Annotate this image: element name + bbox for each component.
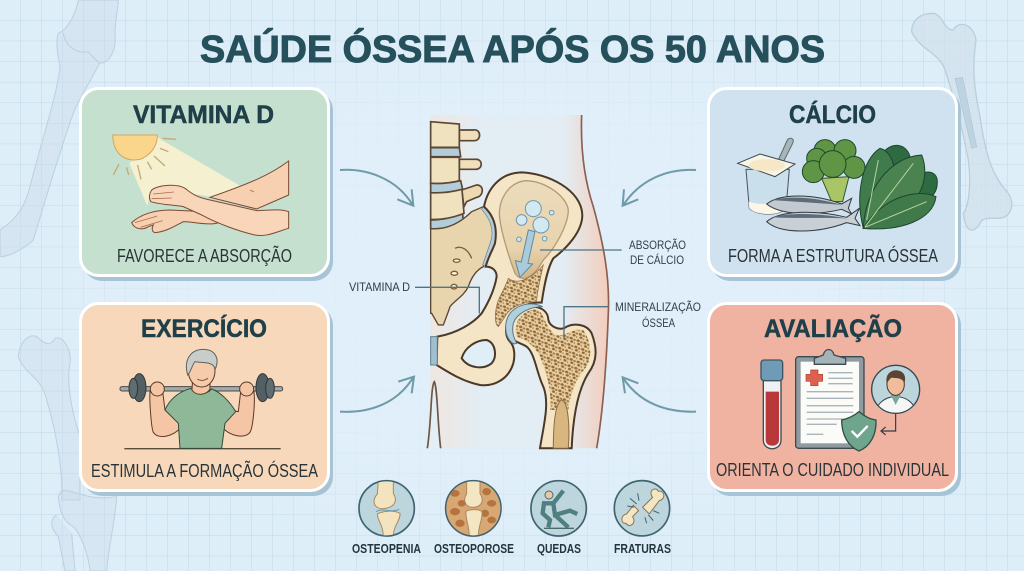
- heading: cálcio: CÁLCIO: [789, 100, 876, 129]
- label: mineralização óssea: ÓSSEA: [642, 317, 675, 330]
- caption: avaliação: ORIENTA O CUIDADO INDIVIDUAL: [716, 460, 949, 480]
- sacrum details: [451, 247, 472, 289]
- label: fraturas: FRATURAS: [614, 542, 671, 556]
- central hip anatomy illustration: [415, 115, 622, 448]
- background bone: top left: [0, 0, 118, 257]
- arrow: vitamina D to centre: [340, 170, 413, 206]
- label: absorção de cálcio: [629, 239, 686, 267]
- label: absorção de cálcio: DE CÁLCIO: [630, 254, 684, 267]
- label: vitamina D: VITAMINA D: [349, 282, 410, 294]
- spongy bone of pelvis: [495, 265, 543, 327]
- absorption arrow: [515, 230, 535, 277]
- heading: avaliação: AVALIAÇÃO: [764, 313, 902, 343]
- sacroiliac cartilage: [482, 207, 496, 267]
- panel: avaliação: [708, 304, 961, 496]
- heading: exercício: EXERCÍCIO: [141, 314, 267, 343]
- heading: vitamina D: VITAMINA D: [133, 101, 274, 129]
- background bone: top right: [912, 13, 1012, 230]
- obturator foramen: [462, 340, 495, 367]
- iliac fossa: [499, 181, 568, 278]
- icon: fraturas: [614, 481, 670, 536]
- arrow: exercício to centre: [340, 377, 414, 412]
- icon: calcium foods: [738, 138, 937, 231]
- sacrum: [431, 207, 494, 325]
- icon: osteoporose: [446, 480, 501, 537]
- title: SAÚDE ÓSSEA APÓS OS 50 ANOS: [200, 27, 825, 71]
- caption: exercício: ESTIMULA A FORMAÇÃO ÓSSEA: [91, 460, 318, 481]
- caption: cálcio: FORMA A ESTRUTURA ÓSSEA: [728, 245, 938, 266]
- background bone: bottom left: [18, 336, 117, 571]
- femoral head cartilage: [506, 304, 543, 344]
- label: mineralização óssea: [615, 301, 701, 330]
- hip bone: [437, 172, 582, 385]
- body silhouette: [427, 115, 609, 448]
- icon: blood tube, clipboard and doctor: [761, 349, 920, 451]
- label: osteoporose: OSTEOPOROSE: [434, 542, 514, 556]
- icon: quedas: [531, 481, 586, 536]
- inner thigh line: [427, 382, 441, 448]
- femur: [510, 307, 596, 448]
- femoral spongy bone: [516, 309, 590, 410]
- spine: [431, 122, 482, 229]
- panel: exercício: [80, 304, 333, 496]
- arrow: avaliação to centre: [623, 377, 696, 412]
- pubic symphysis: [431, 337, 437, 365]
- panel: vitamina D: [80, 88, 333, 281]
- body outline: [581, 115, 609, 448]
- icon: osteopenia: [359, 480, 414, 537]
- icon: man lifting barbell: [120, 349, 283, 449]
- caption: vitamina D: FAVORECE A ABSORÇÃO: [117, 245, 292, 266]
- calcium bubbles: [516, 201, 554, 242]
- leader lines: [415, 250, 622, 338]
- medullary canal: [553, 400, 569, 448]
- panel: cálcio: [708, 88, 961, 281]
- label: quedas: QUEDAS: [537, 542, 581, 556]
- label: mineralização óssea: MINERALIZAÇÃO: [615, 301, 701, 314]
- label: osteopenia: OSTEOPENIA: [352, 542, 421, 556]
- arrow: cálcio to centre: [623, 170, 696, 206]
- label: absorção de cálcio: ABSORÇÃO: [629, 239, 686, 252]
- icon: sun on arms: [113, 135, 289, 236]
